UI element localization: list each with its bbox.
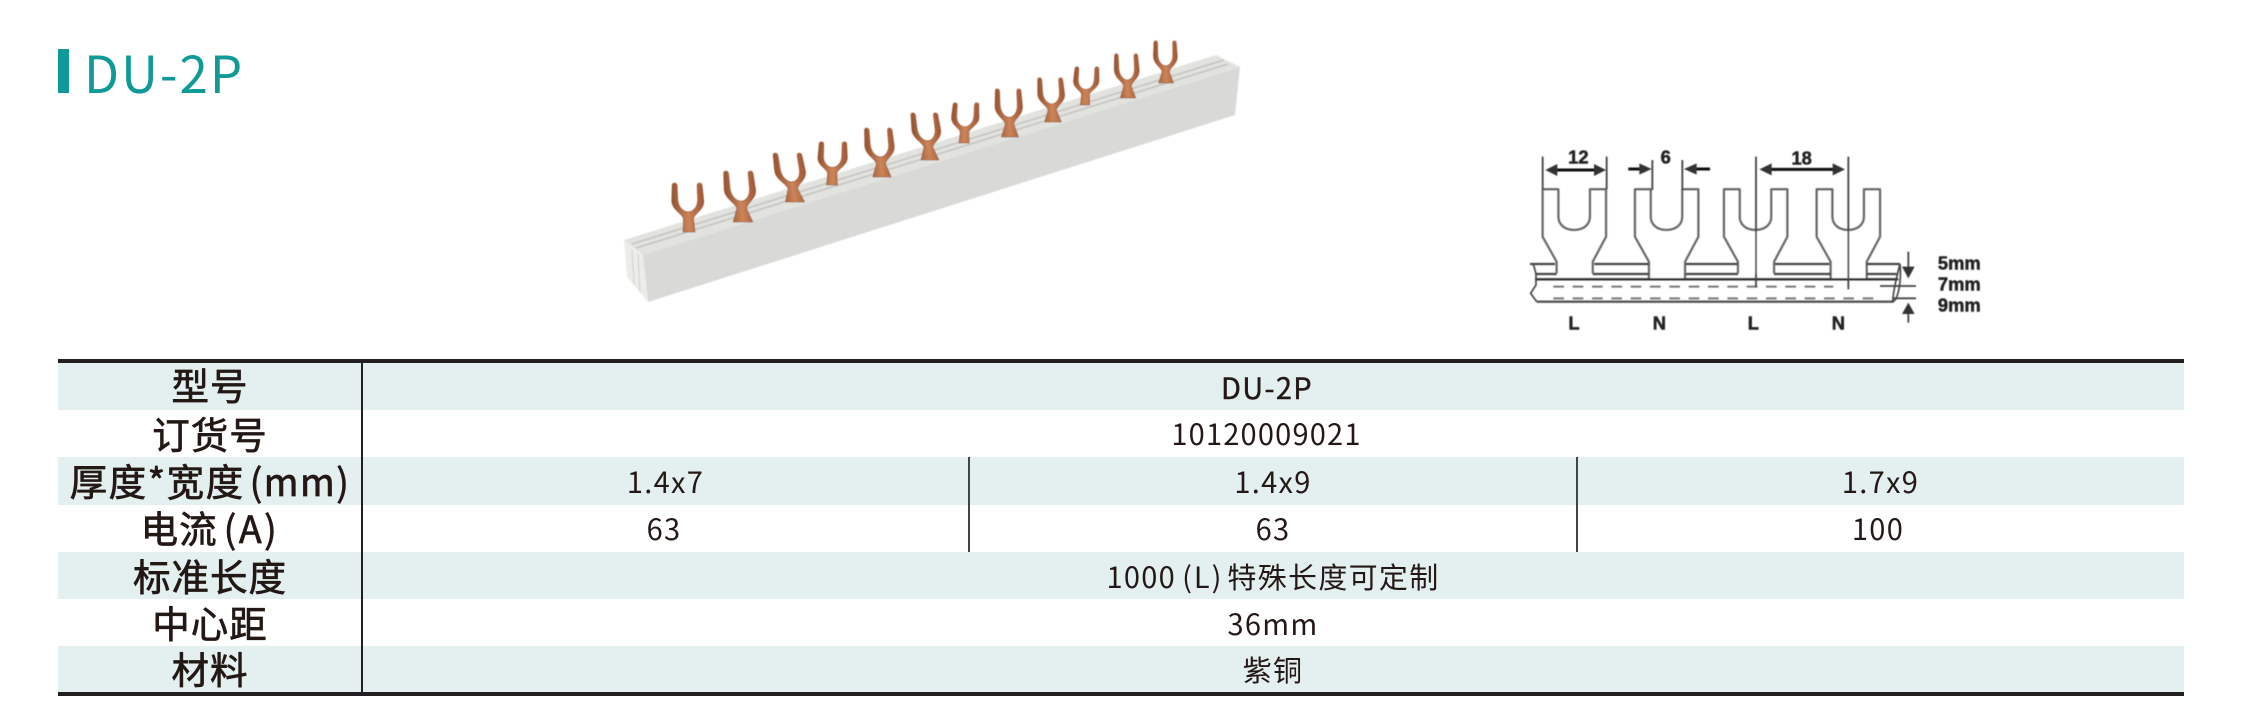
rail end grooves: [632, 250, 640, 292]
product image: copper busbar with fork terminals: [624, 40, 1240, 302]
dimension labels: N: [1653, 312, 1666, 333]
busbar hidden dashes: [1553, 287, 1877, 298]
fork terminals: [671, 41, 1178, 232]
value: 1000 特殊长度可定制: [1106, 554, 1440, 596]
value 1: 63: [647, 507, 681, 549]
value 2: 63: [1256, 507, 1290, 549]
value: (L): [1182, 554, 1223, 596]
value: 10120009021: [1171, 412, 1362, 454]
rail end face: [624, 240, 648, 302]
rail top surface: [624, 55, 1240, 255]
label: 型号: [172, 356, 248, 411]
label: [70, 452, 350, 507]
label: 材料: [172, 640, 248, 695]
table bottom rule: [58, 692, 2184, 696]
row: standard length: [58, 552, 2184, 599]
dimension labels: 18: [1791, 148, 1812, 169]
value: 紫铜: [1243, 648, 1303, 690]
title: DU-2P: [58, 34, 244, 108]
dimension labels: 7mm: [1938, 273, 1981, 294]
table column divider 2: [1576, 457, 1578, 552]
four fork outlines: [1543, 189, 1880, 278]
dimension labels: 9mm: [1938, 294, 1981, 315]
label: (mm): [250, 452, 350, 507]
dimension labels: L: [1568, 312, 1580, 333]
dimension arrows: [1545, 163, 1915, 314]
value 3: 1.7x9: [1842, 460, 1919, 502]
value: 36mm: [1227, 602, 1319, 644]
dimension labels: 6: [1661, 146, 1671, 167]
dimension labels: [1568, 146, 1981, 333]
label: (A): [224, 499, 279, 554]
dimension extension lines: [1543, 157, 1916, 323]
label: 电流: [141, 499, 218, 554]
table column divider 1: [968, 457, 970, 552]
dimension labels: N: [1832, 312, 1845, 333]
title text: DU-2P: [84, 34, 244, 108]
label: 厚度*宽度: [70, 452, 245, 507]
value 3: 100: [1852, 507, 1904, 549]
value 2: 1.4x9: [1234, 460, 1312, 502]
label: [141, 499, 279, 554]
value: DU-2P: [1221, 366, 1313, 408]
row: centre distance: [152, 594, 1319, 648]
dimension labels: 12: [1568, 146, 1589, 167]
rail front face: [643, 67, 1240, 302]
rail slot lines: [632, 60, 1228, 248]
dimension diagram: fork spacing drawing: [1529, 146, 1981, 333]
dimension labels: 5mm: [1938, 252, 1981, 273]
row: current: [141, 499, 1904, 554]
busbar outline: [1530, 264, 1900, 302]
row: thickness x width: [58, 457, 2184, 504]
title accent bar: [58, 49, 69, 93]
row: model: [58, 363, 2184, 410]
row: material: [58, 646, 2184, 692]
specification table: [58, 359, 2184, 696]
table header column divider: [361, 363, 363, 692]
row: order number: [152, 404, 1362, 460]
value 1: 1.4x7: [627, 460, 704, 502]
table top rule: [58, 359, 2184, 363]
label: 中心距: [152, 594, 268, 648]
dimension labels: L: [1748, 312, 1759, 333]
label: 订货号: [152, 404, 268, 460]
label: 标准长度: [133, 546, 287, 602]
